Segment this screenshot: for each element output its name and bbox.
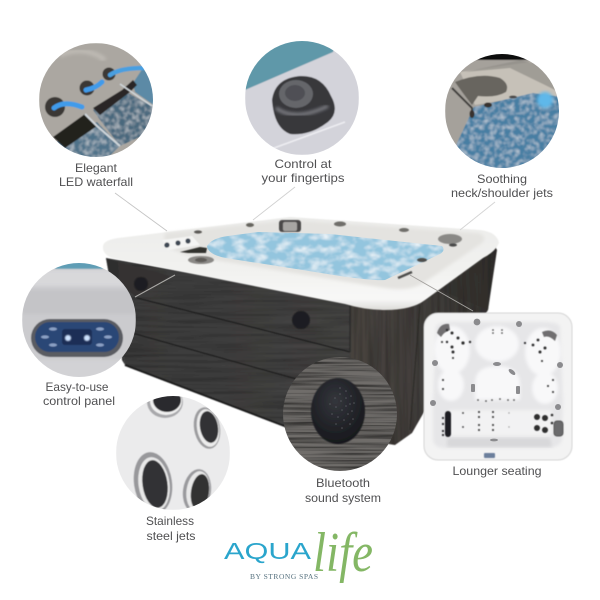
text: Control at your fingertips <box>262 157 344 185</box>
spa shell fittings <box>162 220 462 278</box>
circle: stainless jets <box>116 396 230 510</box>
spa water <box>207 232 444 280</box>
lounger headrests <box>437 324 563 458</box>
text: Bluetooth sound system: sound system <box>305 491 381 505</box>
neck water <box>456 92 559 168</box>
text: Elegant LED waterfall: Elegant <box>75 161 118 175</box>
lounger jets <box>441 329 554 436</box>
text: Lounger seating: Lounger seating <box>452 464 542 478</box>
text: Easy-to-use control panel: control panel <box>43 394 115 408</box>
text: Stainless steel jets: Stainless <box>146 514 194 528</box>
headrest <box>455 76 507 105</box>
jet lower right <box>182 468 212 508</box>
LED jets <box>45 97 65 117</box>
text: Control at your fingertips: Control at <box>274 157 332 171</box>
lounger seats <box>434 326 561 436</box>
text: Soothing neck/shoulder jets <box>451 172 553 200</box>
logo word: life: life <box>313 522 373 584</box>
spa inner shell <box>164 220 484 289</box>
circle: LED waterfall <box>39 43 153 157</box>
spa wood cabinet <box>100 235 500 450</box>
text: Bluetooth sound system: Bluetooth <box>316 476 370 490</box>
leader: fingertips <box>253 187 295 220</box>
keypad <box>31 319 123 357</box>
circle: control at fingertips <box>245 41 359 155</box>
jet right <box>193 406 221 450</box>
dark ledges <box>53 114 97 148</box>
logo tagline: BY STRONG SPAS <box>250 572 318 581</box>
jet top <box>146 396 184 418</box>
spa knobs <box>134 277 310 329</box>
waterfall pool <box>57 122 120 157</box>
spa acrylic rim <box>103 217 499 310</box>
lounger shell <box>424 313 572 460</box>
speaker <box>311 378 365 444</box>
lounger footwell <box>433 322 563 448</box>
text: Stainless steel jets: steel jets <box>146 529 196 543</box>
text: Elegant LED waterfall: LED waterfall <box>59 175 133 189</box>
circle: control panel <box>22 262 136 380</box>
text: Elegant LED waterfall <box>59 161 133 189</box>
text: Soothing neck/shoulder jets: Soothing <box>477 172 527 186</box>
text: Stainless steel jets <box>146 514 196 543</box>
logo: AquaLife by Strong Spas <box>224 522 373 584</box>
text: Easy-to-use control panel <box>43 380 115 408</box>
control knob <box>272 76 335 134</box>
text: Control at your fingertips: your fingertips <box>262 171 344 185</box>
text: Soothing neck/shoulder jets: neck/shoulder jets <box>451 186 553 200</box>
circle: bluetooth speaker <box>283 357 397 471</box>
leader: waterfall <box>115 193 167 231</box>
text: Bluetooth sound system <box>305 476 381 505</box>
logo word: AQUA: AQUA <box>224 538 312 564</box>
leader: lounger <box>410 275 473 311</box>
jet lower left <box>133 452 173 510</box>
leader: neck jets <box>460 202 495 230</box>
circle: neck jets <box>445 50 562 172</box>
text: Easy-to-use control panel: Easy-to-use <box>46 380 109 394</box>
leader: control panel <box>135 275 175 297</box>
lounger top view <box>424 313 572 460</box>
leader lines <box>115 187 495 311</box>
spa tub illustration <box>100 217 500 450</box>
